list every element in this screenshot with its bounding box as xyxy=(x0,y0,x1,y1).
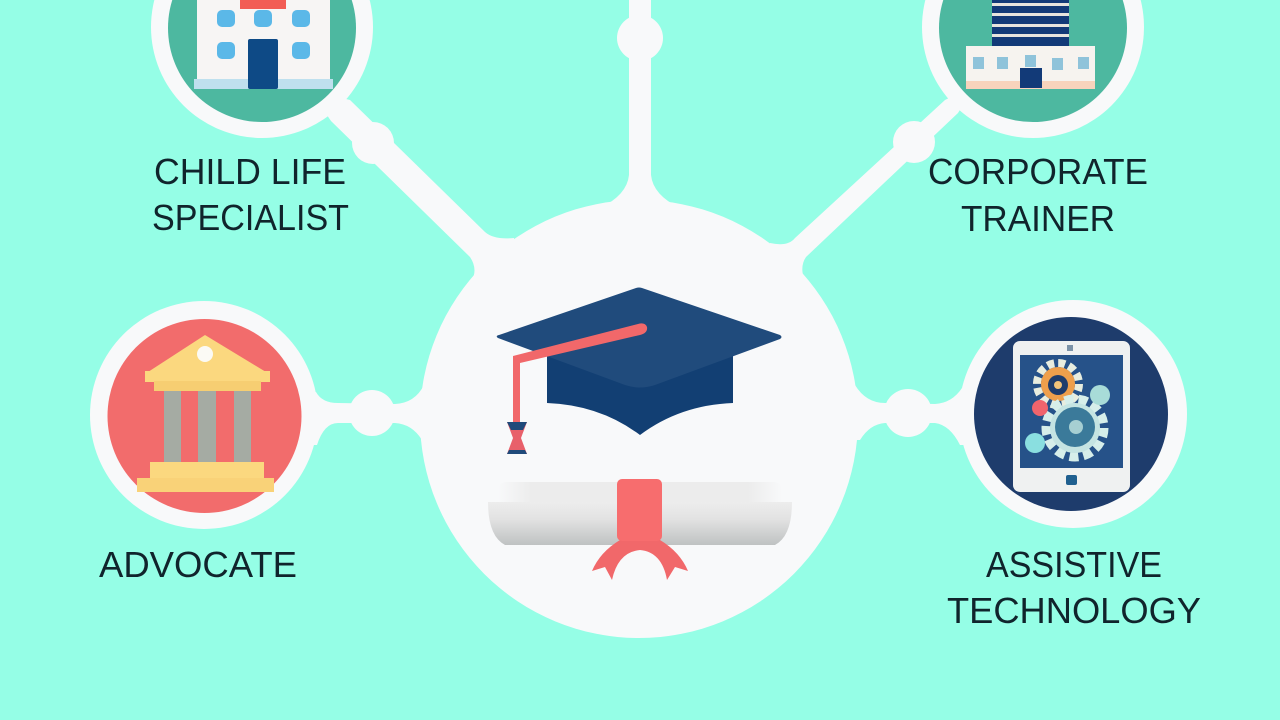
icon disc xyxy=(939,0,1127,122)
label: assistive technology: TECHNOLOGY xyxy=(947,590,1201,631)
label: child life specialist: CHILD LIFE xyxy=(154,151,346,192)
label: advocate: ADVOCATE xyxy=(99,544,297,585)
icon: diploma scroll xyxy=(488,479,792,580)
panel: assistive technology xyxy=(947,300,1201,631)
label: child life specialist: SPECIALIST xyxy=(152,197,349,238)
connector: top right xyxy=(760,85,975,300)
icon: courthouse xyxy=(137,335,274,492)
connector node: left xyxy=(349,390,395,436)
label: corporate trainer: TRAINER xyxy=(961,198,1115,239)
central hub circle xyxy=(420,200,858,638)
icon: office tower xyxy=(966,0,1095,89)
icon ring xyxy=(959,300,1187,528)
label: assistive technology xyxy=(947,544,1201,631)
connector node: top xyxy=(617,15,663,61)
gear: orange xyxy=(1037,363,1079,405)
icon disc xyxy=(974,317,1168,511)
connector network xyxy=(300,0,975,450)
icon disc xyxy=(108,319,302,513)
label: assistive technology: ASSISTIVE xyxy=(986,544,1162,585)
panel: advocate xyxy=(90,301,318,585)
connector: right xyxy=(850,385,975,445)
gear: large teal xyxy=(1046,399,1104,457)
label: child life specialist xyxy=(152,151,349,238)
connector node: top left xyxy=(352,122,394,164)
icon ring xyxy=(151,0,373,138)
icon ring xyxy=(922,0,1144,138)
puzzle pieces xyxy=(1025,385,1110,453)
connector node: top right xyxy=(893,121,935,163)
icon ring xyxy=(90,301,318,529)
panel: corporate trainer xyxy=(922,0,1148,239)
connector: top left xyxy=(310,90,520,300)
icon: graduation cap xyxy=(497,288,782,454)
connector: left xyxy=(300,380,430,450)
label: corporate trainer xyxy=(928,151,1148,239)
panel: child life specialist xyxy=(151,0,373,238)
icon: hospital building xyxy=(194,0,333,89)
connector node: right xyxy=(884,389,932,437)
icon disc xyxy=(168,0,356,122)
icon: tablet with gears xyxy=(1013,341,1130,492)
connector: top xyxy=(600,0,680,208)
label: corporate trainer: CORPORATE xyxy=(928,151,1148,192)
